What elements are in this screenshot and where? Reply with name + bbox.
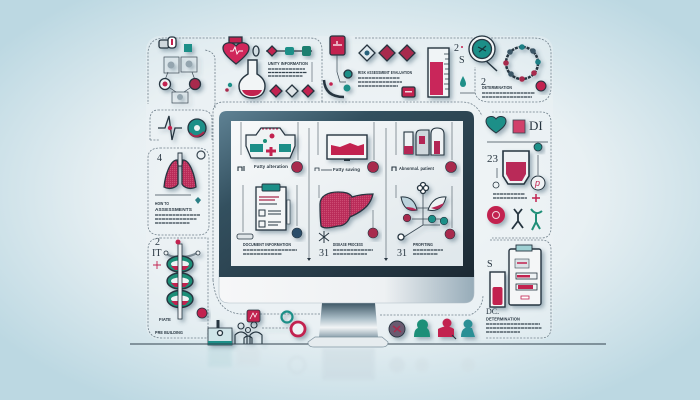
icon: three diamonds left: [270, 85, 314, 97]
monitor bezel: [219, 111, 474, 277]
cell: fatty saving: [315, 135, 378, 172]
icon: clipboard: [256, 184, 290, 230]
icon: branching plant: [398, 182, 455, 240]
icon: diagram: [246, 128, 295, 158]
monitor: [219, 111, 474, 303]
panel: caduceus: 2: [155, 237, 160, 248]
cell: abnormal patient: [392, 128, 456, 172]
panel: dashed outlines: [148, 38, 551, 338]
icon: red ring: [487, 206, 505, 224]
icon: red figure: [512, 209, 523, 229]
cell: liver: [319, 192, 378, 259]
monitor chin: [219, 270, 474, 303]
icon: measuring tube: [428, 48, 449, 97]
icon: badge and pipe: [324, 36, 352, 97]
labels: 2 and S: [454, 43, 466, 87]
panel: caduceus: FIATE: [159, 317, 171, 322]
cell: liver: 31: [319, 248, 329, 259]
icon: test tube: [490, 272, 505, 307]
panel: lungs: HOW TO: [155, 201, 169, 206]
screen grid lines: [241, 122, 452, 260]
text block: top right panel: 2: [481, 77, 486, 88]
text block: right top: [358, 70, 412, 86]
text block: unity information: [268, 61, 312, 82]
cell: fatty alteration: [238, 128, 302, 172]
icon: lungs: [164, 153, 196, 188]
icon: heart: [223, 37, 249, 64]
icon: three diamonds right: [359, 45, 415, 61]
cell: abnormal patient: Abnormal. patient: [399, 166, 434, 171]
cell: plant tree: 31: [397, 248, 407, 259]
icon: liver: [320, 192, 373, 228]
icon: teal figure: [531, 209, 542, 230]
labels: 2 and S: 2: [454, 43, 459, 54]
panel: right cup: 23: [487, 153, 498, 165]
icon: teal heart: [486, 117, 506, 133]
button: [402, 87, 415, 97]
cell: clipboard: DOCUMENT INFORMATION: [243, 242, 291, 247]
icon: red square: [513, 120, 525, 133]
label: D I: DI: [529, 118, 543, 133]
text block: right top: RISK ASSESSMENT EVALUATION: [358, 70, 412, 75]
panel: lower right clipboard: [486, 245, 542, 332]
icons: bottom people row: [389, 318, 475, 339]
panel: right cup: [486, 117, 548, 230]
panel backing: [146, 36, 553, 340]
cell: fatty saving: Fatty saving: [333, 167, 360, 172]
panel: lungs: ASSESSMENTS: [155, 207, 192, 212]
text block: unity information: UNITY INFORMATION: [268, 61, 308, 66]
panel: caduceus: PRE BUILDING: [155, 330, 183, 335]
panel: right cup: p: [534, 178, 540, 188]
cell: plant tree: PROFITING: [413, 242, 433, 247]
panel: caduceus: IT: [152, 248, 161, 259]
screen: [231, 121, 463, 266]
cell: liver: DISEASE PROCESS: [333, 242, 363, 247]
reflection on desk: [208, 347, 475, 380]
icon: bead ring: [503, 44, 541, 82]
icon: clipboard right: [509, 245, 541, 305]
icon: display with chart: [327, 135, 367, 161]
icon: red dot top right: [536, 81, 546, 91]
icon: magnifier: [469, 36, 497, 71]
icon: chain of nodes: [253, 46, 312, 56]
panel: lower right clipboard: S: [487, 259, 493, 270]
icon: cup: [503, 151, 529, 184]
icon: bottles: [404, 128, 444, 155]
panel: caduceus: [152, 237, 207, 335]
cell: plant tree: [397, 182, 455, 259]
labels: 2 and S: S: [459, 55, 465, 66]
icon: teal and red rings: [262, 312, 305, 336]
icon: flask: [225, 60, 265, 98]
desk line: [130, 343, 606, 345]
panel: lower right clipboard: DC.: [486, 307, 499, 316]
text block: top right panel: [460, 77, 535, 97]
icon: case and people: [208, 310, 262, 345]
panel: top left tree diagram: [159, 37, 200, 103]
panel: lungs: [155, 151, 205, 223]
cell: clipboard: [237, 184, 302, 254]
icon: caduceus: [164, 240, 200, 319]
screen arrows: [307, 258, 388, 261]
cell: fatty alteration: Fatty alteration: [254, 164, 288, 169]
panel: lungs: 4: [157, 153, 162, 164]
text block: top right panel: DETERMINATION: [482, 85, 512, 90]
icon: stand and base: [308, 303, 388, 347]
panel: lower right clipboard: DETERMINATION: [486, 316, 520, 322]
icon: ecg and teal circle: [158, 116, 206, 140]
